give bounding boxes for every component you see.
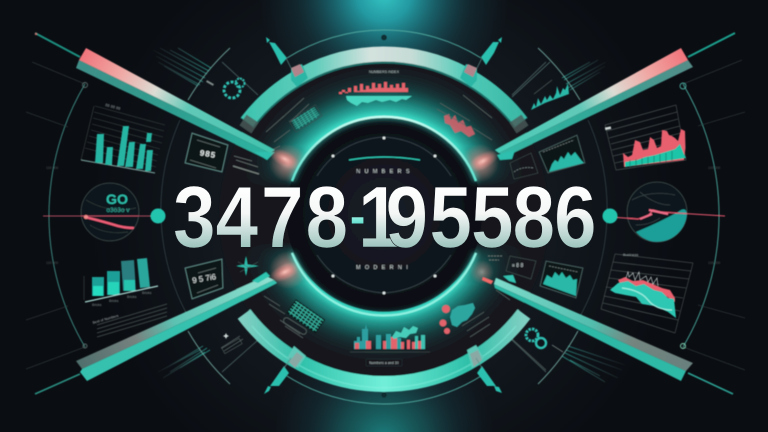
- panel: ring city chart bottom: Numbers a and 30: [369, 361, 399, 365]
- axis tick labels: 100 000: [708, 166, 720, 170]
- main number: -: [350, 188, 365, 246]
- panel: ring chart right: [437, 95, 492, 140]
- panel: right mountain card: [539, 135, 585, 173]
- main number: 195586: [358, 169, 597, 266]
- beam: lower left: [35, 258, 304, 394]
- beam: upper right: [464, 33, 735, 176]
- panel: lower left bar chart: Bricks: [127, 295, 137, 299]
- panel: top ring chart: [339, 70, 412, 106]
- beam: upper left: [35, 33, 304, 174]
- panel: left globe: [43, 183, 155, 241]
- inner ring: upper glow: [292, 117, 476, 181]
- panel: left globe: o3ö3o v: [106, 207, 130, 214]
- main number: 3478: [173, 169, 348, 266]
- panel: lower left readout: [185, 259, 223, 299]
- panel: lower left bar chart: Bricks: [92, 303, 102, 307]
- icon: left teal dot: [150, 208, 166, 224]
- panel: ring text lower left: [264, 296, 308, 338]
- panel: upper left bar chart: [81, 102, 165, 173]
- panel: upper left bar chart: 88 88 88: [105, 102, 122, 111]
- label: numbers: NUMBERS: [356, 169, 414, 175]
- panel: lower right small card: ≡ 8 8: [512, 263, 523, 269]
- axis tick labels: 100 000: [46, 166, 58, 170]
- panel: lower right small card: [488, 256, 536, 279]
- panel: lower left center note: [221, 333, 243, 354]
- axis tick labels: [46, 166, 720, 265]
- panel: left globe: GO: [106, 191, 128, 207]
- panel: ring text left: [262, 98, 309, 155]
- panel: lower right area chart: [601, 253, 693, 333]
- panel: right small card: [510, 153, 538, 179]
- icon: teal star: [236, 256, 259, 276]
- panel: upper left readout: 985: [199, 148, 217, 160]
- streak lines: [153, 48, 625, 382]
- panel: lower left bar chart: Best of Numbers: [92, 314, 119, 325]
- icon: right gears: [511, 329, 563, 370]
- panel: ring grid left: [289, 105, 322, 132]
- panel: right globe: [610, 182, 725, 242]
- outer arc: bottom: [244, 314, 524, 388]
- icon: right teal dot: [602, 208, 618, 224]
- panel: upper left small text: [233, 156, 259, 174]
- panel: upper right bar chart: [605, 105, 686, 170]
- axis tick labels: 100 000: [46, 261, 58, 265]
- outer arc: top: [243, 54, 525, 128]
- panel: lower left bar chart: Bricks: [142, 291, 152, 295]
- band between rings: [232, 64, 538, 376]
- label: modern: MODERNI: [356, 265, 412, 271]
- icon: left gear cluster: [206, 78, 244, 98]
- panel: lower left bar chart: [84, 258, 167, 337]
- panel: upper right spike chart: [512, 62, 569, 110]
- guide arcs: [26, 48, 745, 384]
- panel: ring chart bottom left: [286, 299, 325, 334]
- panel: lower left readout: 9 5 7i6: [192, 272, 217, 285]
- inner dial markers: [317, 137, 451, 294]
- axis tick labels: 100 000: [708, 261, 720, 265]
- panel: upper left readout: [185, 133, 228, 172]
- panel: top ring chart: NUMBERS INDEX: [369, 70, 400, 74]
- panel: lower right mountain card: [540, 261, 583, 298]
- panel: lower right area chart: Business: [623, 253, 639, 257]
- icon: arc clamps: [287, 64, 484, 368]
- icon: diamond markers: [264, 37, 502, 394]
- panel: ring city chart bottom: [350, 324, 430, 366]
- inner disk: [286, 116, 482, 312]
- panel: lower left bar chart: Bricks: [109, 299, 119, 303]
- inner ring: lower glow: [292, 253, 476, 315]
- outer thin arcs and markers: [287, 30, 481, 404]
- beam: lower right: [482, 275, 733, 394]
- panel: ring blob chart right: [440, 290, 510, 337]
